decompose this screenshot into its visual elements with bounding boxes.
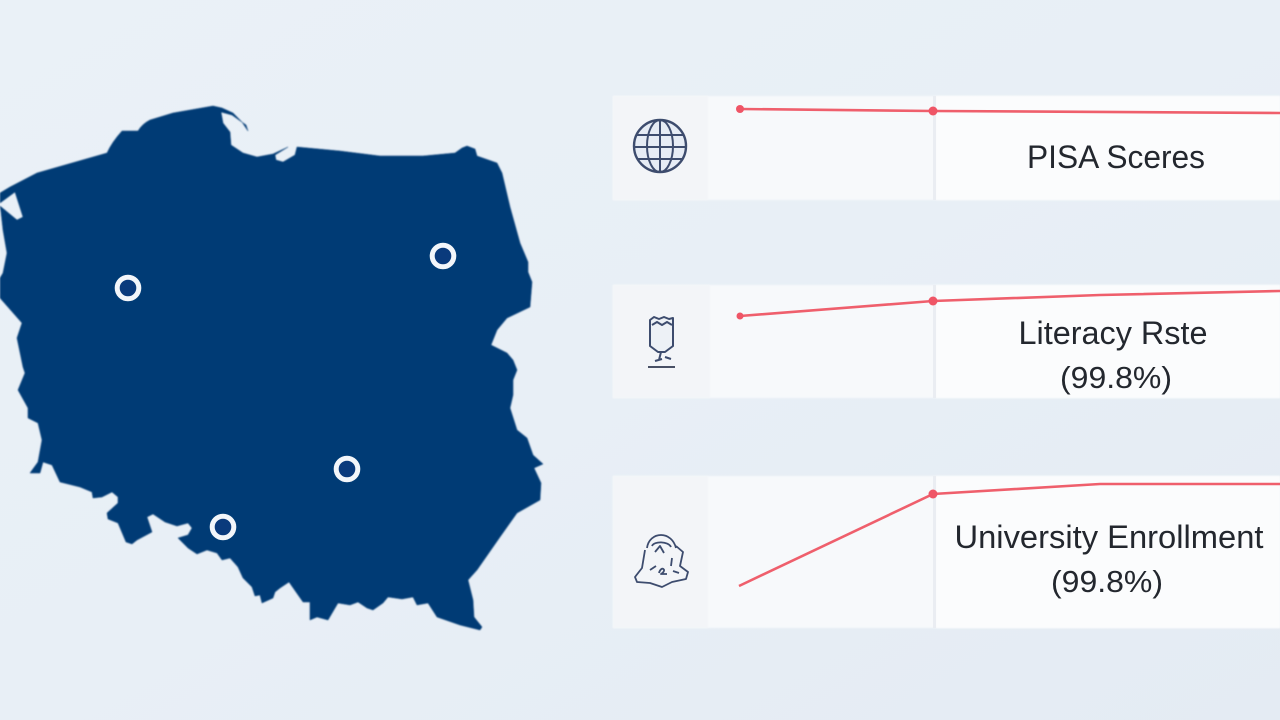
city marker: south-east bbox=[336, 458, 358, 480]
value: enrollment: (99.8%) bbox=[1051, 564, 1163, 599]
panel: Literacy Rate bbox=[613, 285, 1280, 398]
city marker: south bbox=[212, 516, 234, 538]
panel: University Enrollment bbox=[613, 476, 1280, 628]
value: literacy: (99.8%) bbox=[1060, 360, 1172, 395]
city marker: west bbox=[117, 277, 139, 299]
city marker: north-east bbox=[432, 245, 454, 267]
label: Literacy Rate: Literacy Rste bbox=[1018, 315, 1208, 351]
trend line: enrollment bbox=[739, 484, 1280, 586]
map of Poland bbox=[0, 106, 543, 630]
label: University Enrollment: University Enrollment bbox=[954, 519, 1264, 555]
icon: literacy figure bbox=[648, 317, 675, 367]
panel: PISA Scores bbox=[613, 96, 1280, 200]
trend line: PISA bbox=[736, 105, 1280, 116]
icon: university building bbox=[635, 535, 688, 587]
icon: globe bbox=[634, 120, 686, 172]
label: PISA Scores: PISA Sceres bbox=[1027, 139, 1205, 175]
trend line: literacy bbox=[736, 291, 1280, 320]
